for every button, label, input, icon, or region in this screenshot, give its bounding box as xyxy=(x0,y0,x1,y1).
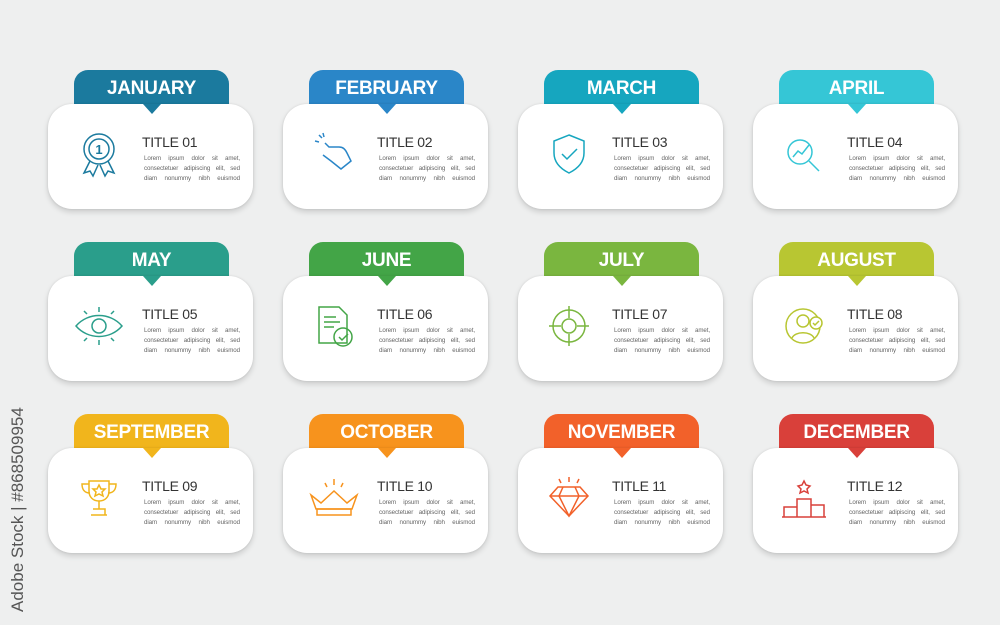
icon: hand xyxy=(314,132,352,170)
tab: NOVEMBER xyxy=(568,422,675,443)
icon: eye xyxy=(75,307,123,345)
title: TITLE 01 xyxy=(142,134,197,150)
tab xyxy=(74,70,229,114)
card xyxy=(48,448,253,553)
tab xyxy=(544,414,699,458)
tab xyxy=(309,414,464,458)
text: Lorem ipsum dolor sit amet, consectetuer adipiscing elit, sed diam nonummy nibh euismod xyxy=(614,327,710,354)
text: Lorem ipsum dolor sit amet, consectetuer adipiscing elit, sed diam nonummy nibh euismod xyxy=(379,155,475,182)
panel: september xyxy=(46,414,255,558)
panel: february xyxy=(281,70,490,214)
text: Lorem ipsum dolor sit amet, consectetuer adipiscing elit, sed diam nonummy nibh euismod xyxy=(849,155,945,182)
tab xyxy=(74,242,229,286)
card xyxy=(48,276,253,381)
icon: magnifier chart xyxy=(787,139,820,172)
title: TITLE 04 xyxy=(847,134,902,150)
text: Lorem ipsum dolor sit amet, consectetuer adipiscing elit, sed diam nonummy nibh euismod xyxy=(144,499,240,526)
panel: march xyxy=(516,70,725,214)
tab: SEPTEMBER xyxy=(94,422,209,443)
card xyxy=(753,276,958,381)
text: Lorem ipsum dolor sit amet, consectetuer adipiscing elit, sed diam nonummy nibh euismod xyxy=(614,155,710,182)
tab: APRIL xyxy=(829,78,884,99)
icon: shield xyxy=(553,134,585,174)
panel: april xyxy=(751,70,960,214)
tab xyxy=(544,70,699,114)
panel: december xyxy=(751,414,960,558)
tab xyxy=(779,70,934,114)
tab: MARCH xyxy=(587,78,656,99)
title: TITLE 10 xyxy=(377,478,432,494)
tab: FEBRUARY xyxy=(335,78,438,99)
icon: document check xyxy=(318,306,353,347)
title: TITLE 09 xyxy=(142,478,197,494)
panel: january xyxy=(46,70,255,214)
icon: target xyxy=(549,306,589,346)
icon: badge: 1 xyxy=(95,142,103,157)
panel: august xyxy=(751,242,960,386)
panel: may xyxy=(46,242,255,386)
tab xyxy=(544,242,699,286)
tab: JANUARY xyxy=(107,78,196,99)
icon: crown xyxy=(309,479,359,516)
tab: OCTOBER xyxy=(340,422,433,443)
tab: AUGUST xyxy=(817,250,896,271)
text: Lorem ipsum dolor sit amet, consectetuer adipiscing elit, sed diam nonummy nibh euismod xyxy=(379,499,475,526)
tab xyxy=(74,414,229,458)
tab xyxy=(309,70,464,114)
card xyxy=(283,104,488,209)
card xyxy=(753,104,958,209)
card xyxy=(518,448,723,553)
title: TITLE 06 xyxy=(377,306,432,322)
card xyxy=(518,104,723,209)
tab: MAY xyxy=(132,250,171,271)
text: Lorem ipsum dolor sit amet, consectetuer adipiscing elit, sed diam nonummy nibh euismod xyxy=(379,327,475,354)
card xyxy=(283,448,488,553)
card xyxy=(283,276,488,381)
title: TITLE 12 xyxy=(847,478,902,494)
tab xyxy=(779,414,934,458)
tab: DECEMBER xyxy=(803,422,910,443)
tab xyxy=(779,242,934,286)
icon: badge xyxy=(82,133,116,178)
icon: podium xyxy=(782,480,826,518)
text: Lorem ipsum dolor sit amet, consectetuer adipiscing elit, sed diam nonummy nibh euismod xyxy=(849,499,945,526)
card xyxy=(48,104,253,209)
watermark: Adobe Stock | #868509954 xyxy=(8,407,27,612)
icon: user check xyxy=(785,308,823,344)
title: TITLE 05 xyxy=(142,306,197,322)
icon: trophy xyxy=(81,480,117,516)
panel: june xyxy=(281,242,490,386)
text: Lorem ipsum dolor sit amet, consectetuer adipiscing elit, sed diam nonummy nibh euismod xyxy=(144,327,240,354)
panel: july xyxy=(516,242,725,386)
panel: october xyxy=(281,414,490,558)
tab: JULY xyxy=(599,250,644,271)
title: TITLE 11 xyxy=(612,478,666,494)
card xyxy=(753,448,958,553)
title: TITLE 03 xyxy=(612,134,667,150)
title: TITLE 02 xyxy=(377,134,432,150)
text: Lorem ipsum dolor sit amet, consectetuer adipiscing elit, sed diam nonummy nibh euismod xyxy=(144,155,240,182)
tab: JUNE xyxy=(362,250,411,271)
title: TITLE 07 xyxy=(612,306,667,322)
text: Lorem ipsum dolor sit amet, consectetuer adipiscing elit, sed diam nonummy nibh euismod xyxy=(614,499,710,526)
title: TITLE 08 xyxy=(847,306,902,322)
tab xyxy=(309,242,464,286)
icon: diamond xyxy=(549,477,589,518)
text: Lorem ipsum dolor sit amet, consectetuer adipiscing elit, sed diam nonummy nibh euismod xyxy=(849,327,945,354)
card xyxy=(518,276,723,381)
panel: november xyxy=(516,414,725,558)
